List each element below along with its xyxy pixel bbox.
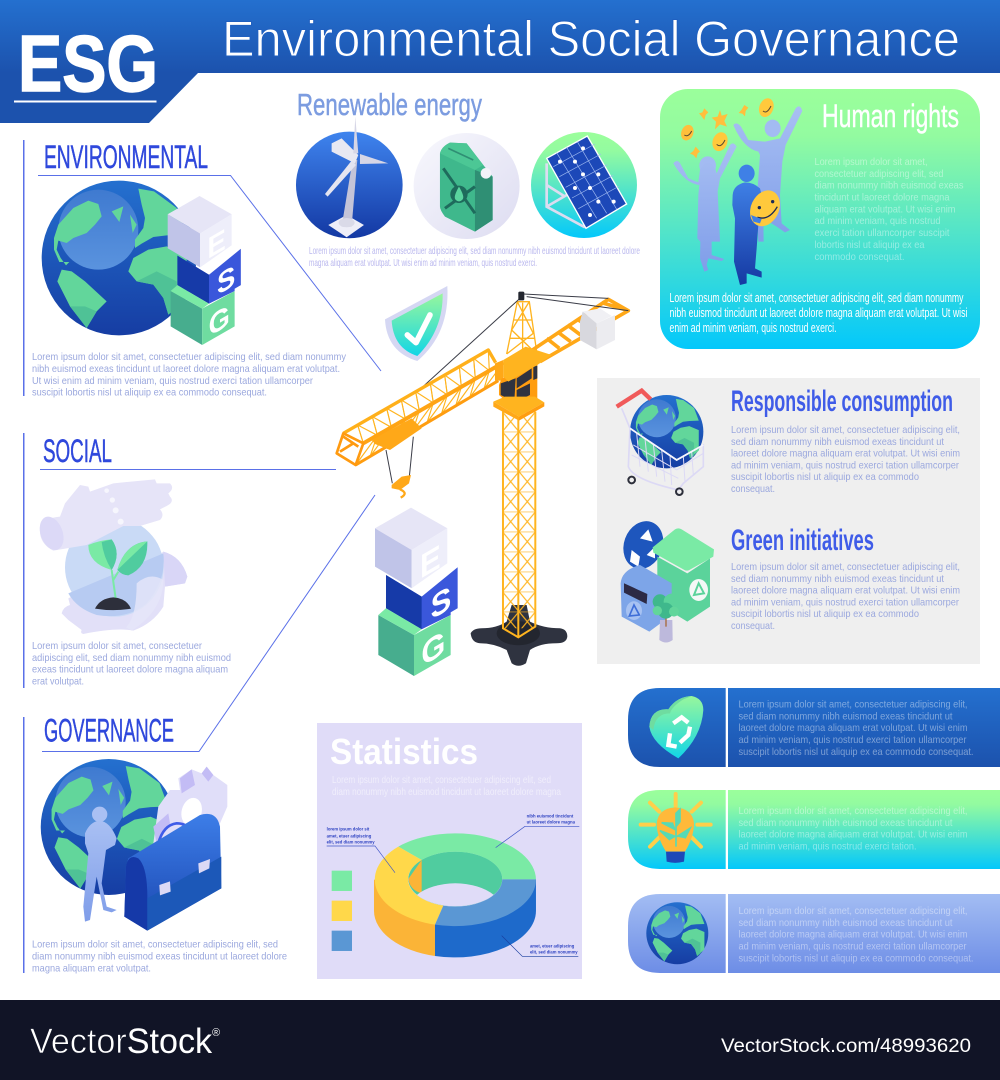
crane cab (493, 347, 552, 421)
text block: social: Lorem ipsum dolor sit amet, consectetuer (32, 640, 202, 652)
text block: responsible consumption: sed diam nonummy nibh euismod exeas tincidunt ut (731, 436, 944, 448)
crane trolley (372, 418, 422, 450)
logo underline (14, 100, 156, 102)
text block: human rights bold (670, 290, 968, 335)
text block: band three: suscipit lobortis nisl ut aliquip ex ea commodo consequat. (738, 952, 974, 964)
crane hook (392, 475, 411, 498)
heading: governance: GOVERNANCE (44, 712, 174, 748)
text block: band two: laoreet dolore magna aliquam erat volutpat. Ut wisi enim (738, 828, 968, 840)
text block: governance: Lorem ipsum dolor sit amet, consectetuer adipiscing elit, sed (32, 938, 278, 950)
text block: human rights light: commodo consequat. (814, 251, 904, 263)
callout: left label (327, 827, 395, 873)
stack of ESG blocks (375, 508, 458, 676)
text block: human rights light: tincidunt ut laoreet dolore magna (814, 192, 950, 204)
band: globe (628, 894, 1000, 973)
text block: green initiatives: ad minim veniam, quis nostrud exerci tation ullamcorper (731, 596, 959, 608)
text block: band two: sed diam nonummy nibh euismod exeas tincidunt ut (738, 817, 953, 829)
icon: globe (646, 902, 708, 964)
text block: responsible consumption (731, 424, 960, 495)
crane jib (337, 347, 552, 498)
stack of ESG blocks: S (431, 577, 451, 627)
illustration: tower crane (337, 292, 628, 676)
icon: globe in shopping cart (617, 391, 703, 495)
text block: green initiatives: Lorem ipsum dolor sit amet, consectetuer adipiscing elit, (731, 561, 960, 573)
callout: bottom right label: amet, etuer adipiscing (530, 944, 574, 950)
counterweight (580, 308, 615, 349)
text block: social (32, 640, 231, 688)
icon: recycling heart (649, 696, 703, 758)
text block: responsible consumption: consequat. (731, 483, 775, 495)
text block: green initiatives (731, 561, 960, 632)
icon: recycling bins and plant (617, 516, 714, 642)
text block: band three: laoreet dolore magna aliquam erat volutpat. Ut wisi enim (738, 928, 968, 940)
icon: globe, person, gear and briefcase (41, 759, 227, 931)
text block: responsible consumption: ad minim veniam, quis nostrud exerci tation ullamcorper (731, 460, 959, 472)
icon: globe with ESG blocks: S (217, 258, 235, 302)
text block: human rights light: diam nonummy nibh euismod exeas (814, 180, 964, 192)
crane mast head (518, 292, 524, 300)
icon: globe with ESG blocks (42, 181, 241, 345)
heading: social: SOCIAL (43, 433, 112, 469)
icon: jerry can (414, 133, 520, 239)
callout: left label: amet, etuer adipiscing (327, 833, 371, 839)
panel: environmental (23, 139, 381, 398)
panel: statistics (317, 723, 582, 979)
footer bar (0, 1000, 1000, 1080)
stack of ESG blocks: E (420, 536, 441, 586)
connector line: governance (42, 495, 375, 752)
illustration: people with smileys (673, 96, 802, 285)
text block: band two: Lorem ipsum dolor sit amet, consectetuer adipiscing elit, (738, 805, 968, 817)
text block: human rights bold: enim ad minim veniam, quis nostrud exerci. (670, 320, 836, 335)
callout: left label: lorem ipsum dolor sit (327, 827, 370, 833)
text block: human rights light: ad minim veniam, quis nostrud (814, 215, 941, 227)
text block: human rights light: consectetuer adipiscing elit, sed (814, 168, 944, 180)
text block: responsible consumption: laoreet dolore magna aliquam erat volutpat. Ut wisi enim (731, 448, 960, 460)
crane counter jib (530, 299, 628, 362)
callout: top right label (496, 813, 579, 848)
text block: band three: Lorem ipsum dolor sit amet, consectetuer adipiscing elit, (738, 905, 968, 917)
text block: human rights light: aliquam erat volutpat. Ut wisi enim (814, 204, 956, 216)
callout: left label: elit, sed diam nonummy (327, 839, 375, 845)
text block: environmental: nibh euismod exeas tincidunt ut laoreet dolore magna aliquam erat volutpat. (32, 363, 340, 375)
callout: top right label: ut laoreet dolore magna (527, 820, 575, 826)
heading: renewable energy: Renewable energy (297, 87, 482, 122)
crane base (471, 605, 567, 666)
icon: globe with ESG blocks: G (209, 298, 230, 343)
text block: human rights light: lobortis nisl ut aliquip ex ea (814, 239, 925, 251)
connector line: environmental (38, 176, 381, 371)
callout: bottom right label (502, 936, 578, 956)
text block: band one: sed diam nonummy nibh euismod exeas tincidunt ut (738, 710, 953, 722)
crane top tower (507, 302, 537, 356)
icon: security shield (385, 286, 448, 361)
text block: human rights light (814, 156, 964, 263)
panel: social (23, 433, 336, 688)
text block: band one: suscipit lobortis nisl ut aliquip ex ea commodo consequat. (738, 746, 974, 758)
text block: renewable energy (309, 245, 640, 269)
icon: solar panel (531, 132, 637, 238)
crane mast (502, 412, 536, 637)
heading: environmental: ENVIRONMENTAL (44, 139, 208, 175)
text block: renewable energy: magna aliquam erat volutpat. Ut wisi enim ad minim veniam, quis nostrud exerci. (309, 257, 537, 269)
donut chart (374, 833, 536, 957)
text block: social: exeas tincidunt ut laoreet dolore magna aliquam (32, 664, 228, 676)
text block: environmental (32, 351, 347, 398)
text block: environmental: Lorem ipsum dolor sit amet, consectetuer adipiscing elit, sed diam nonummy (32, 351, 347, 363)
text block: renewable energy: Lorem ipsum dolor sit amet, consectetuer adipiscing elit, sed diam nonummy nibh euismod tincidunt ut laoreet dolore (309, 245, 640, 257)
panel: governance (23, 495, 375, 974)
text block: governance (32, 938, 287, 974)
callout: bottom right label: elit, sed diam nonummy (530, 950, 578, 956)
text block: green initiatives: consequat. (731, 620, 775, 632)
text block: governance: magna aliquam erat volutpat. (32, 962, 151, 974)
band: recycling heart (628, 688, 1000, 767)
text block: statistics: Lorem ipsum dolor sit amet, consectetuer adipiscing elit, sed (332, 774, 551, 786)
icon: light bulb with leaves (641, 794, 711, 863)
icon: wind turbine (296, 117, 403, 238)
header banner (0, 0, 1000, 123)
icon: hands protecting a seedling (35, 479, 187, 634)
band: light bulb (628, 790, 1000, 869)
panel: responsible consumption and green initiatives (597, 378, 980, 664)
text block: band one (738, 698, 974, 758)
text block: governance: diam nonummy nibh euismod exeas tincidunt ut laoreet dolore (32, 950, 287, 962)
text block: statistics: diam nonummy nibh euismod tincidunt ut laoreet dolore magna (332, 786, 561, 798)
footer logo: VectorStock (30, 1022, 214, 1061)
text block: human rights light: Lorem ipsum dolor sit amet, (814, 156, 928, 168)
text block: green initiatives: sed diam nonummy nibh euismod exeas tincidunt ut (731, 573, 944, 585)
text block: band three (738, 905, 974, 964)
icon: globe with ESG blocks: E (208, 222, 226, 266)
divider line: social (40, 468, 336, 470)
title: Environmental Social Governance (222, 11, 960, 67)
text block: band two (738, 805, 968, 852)
panel: renewable energy (296, 87, 640, 269)
crane base hub (497, 621, 540, 645)
stack of ESG blocks: G (421, 622, 445, 674)
text block: environmental: suscipit lobortis nisl ut aliquip ex ea commodo consequat. (32, 386, 267, 398)
panel: human rights (660, 89, 980, 349)
text block: band one: Lorem ipsum dolor sit amet, consectetuer adipiscing elit, (738, 698, 968, 710)
footer logo: ® (212, 1027, 220, 1039)
footer image id: VectorStock.com/48993620 (721, 1036, 971, 1057)
text block: band three: sed diam nonummy nibh euismod exeas tincidunt ut (738, 917, 953, 929)
callout: top right label: nibh euismod tincidunt (527, 813, 574, 819)
text block: band three: ad minim veniam, quis nostrud exerci tation ullamcorper (738, 940, 967, 952)
text block: responsible consumption: Lorem ipsum dolor sit amet, consectetuer adipiscing elit, (731, 424, 960, 436)
text block: band one: laoreet dolore magna aliquam erat volutpat. Ut wisi enim (738, 722, 968, 734)
text block: environmental: Ut wisi enim ad minim veniam, quis nostrud exerci tation ullamcorper (32, 375, 313, 387)
text block: social: erat volutpat. (32, 676, 84, 688)
text block: statistics (332, 774, 561, 798)
logo: ESG: ESG (18, 19, 158, 108)
text block: social: adipiscing elit, sed diam nonummy nibh euismod (32, 652, 231, 664)
heading: green initiatives: Green initiatives (731, 524, 874, 557)
legend swatches (332, 871, 352, 951)
text block: band two: ad minim veniam, quis nostrud exerci tation. (738, 840, 916, 852)
text block: green initiatives: laoreet dolore magna aliquam erat volutpat. Ut wisi enim (731, 584, 960, 596)
text block: human rights light: exerci tation ullamcorper suscipit (814, 227, 950, 239)
text block: green initiatives: suscipit lobortis nisl ut aliquip ex ea commodo (731, 608, 919, 620)
crane cables (386, 294, 628, 483)
text block: band one: ad minim veniam, quis nostrud exerci tation ullamcorper (738, 734, 967, 746)
text block: responsible consumption: suscipit lobortis nisl ut aliquip ex ea commodo (731, 471, 919, 483)
heading: statistics: Statistics (330, 731, 478, 772)
